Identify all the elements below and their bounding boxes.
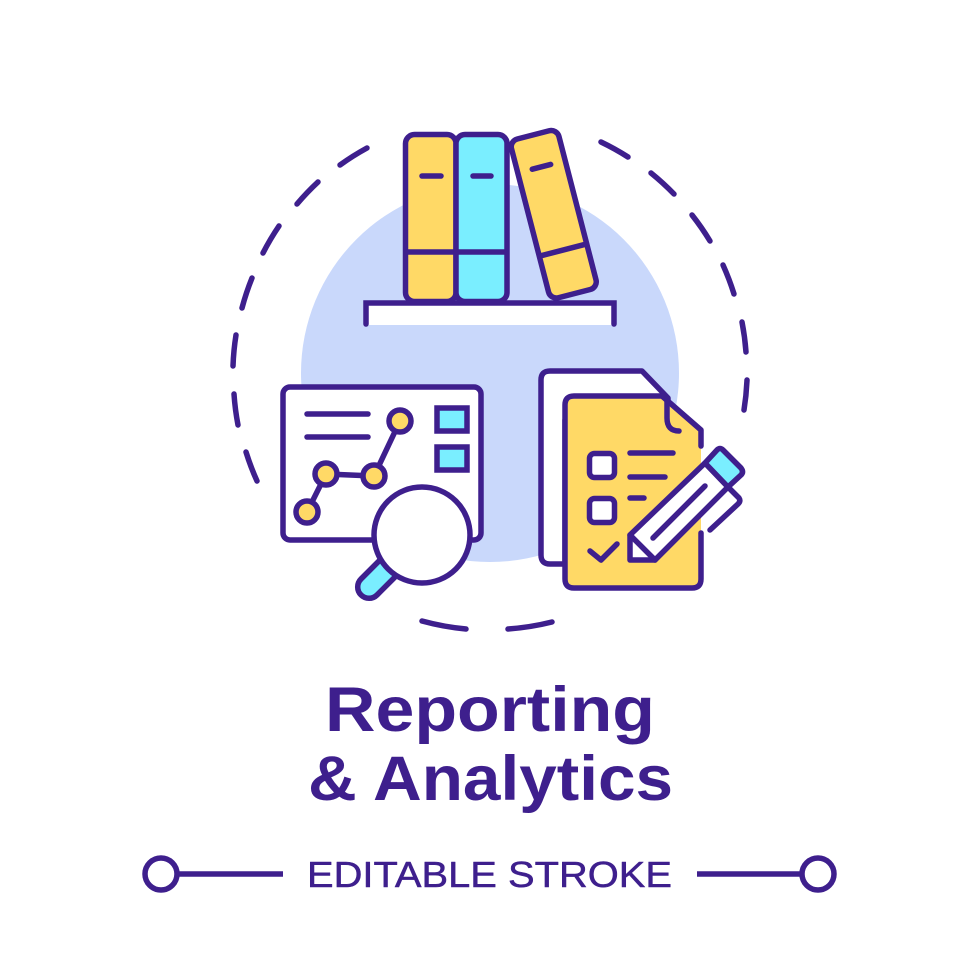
icon: checklist documents with pencil: [541, 371, 742, 588]
title: & Analytics: [308, 744, 673, 814]
yellow book: [406, 134, 456, 302]
icon: analytics board with magnifier: [283, 387, 481, 598]
legend squares: [437, 408, 467, 470]
line chart: [296, 410, 411, 523]
footer label: EDITABLE STROKE: [307, 854, 672, 895]
editable stroke footer: [145, 854, 834, 895]
front document: [565, 396, 701, 588]
checklist: [590, 453, 673, 560]
magnifier handle: [358, 559, 397, 598]
background blue circle: [301, 184, 679, 562]
title: Reporting: [325, 675, 655, 745]
pencil: [630, 448, 742, 560]
title: [308, 675, 673, 814]
tilted yellow book: [510, 129, 598, 300]
left handle: [145, 858, 283, 890]
icon: books on shelf: [366, 129, 614, 325]
back sheet: [541, 371, 668, 564]
board: [283, 387, 481, 540]
magnifier lens: [374, 487, 470, 583]
dashed ring: [233, 142, 747, 629]
cyan book: [456, 134, 507, 302]
right handle: [697, 858, 834, 890]
shelf: [366, 303, 614, 325]
text lines: [307, 414, 368, 437]
